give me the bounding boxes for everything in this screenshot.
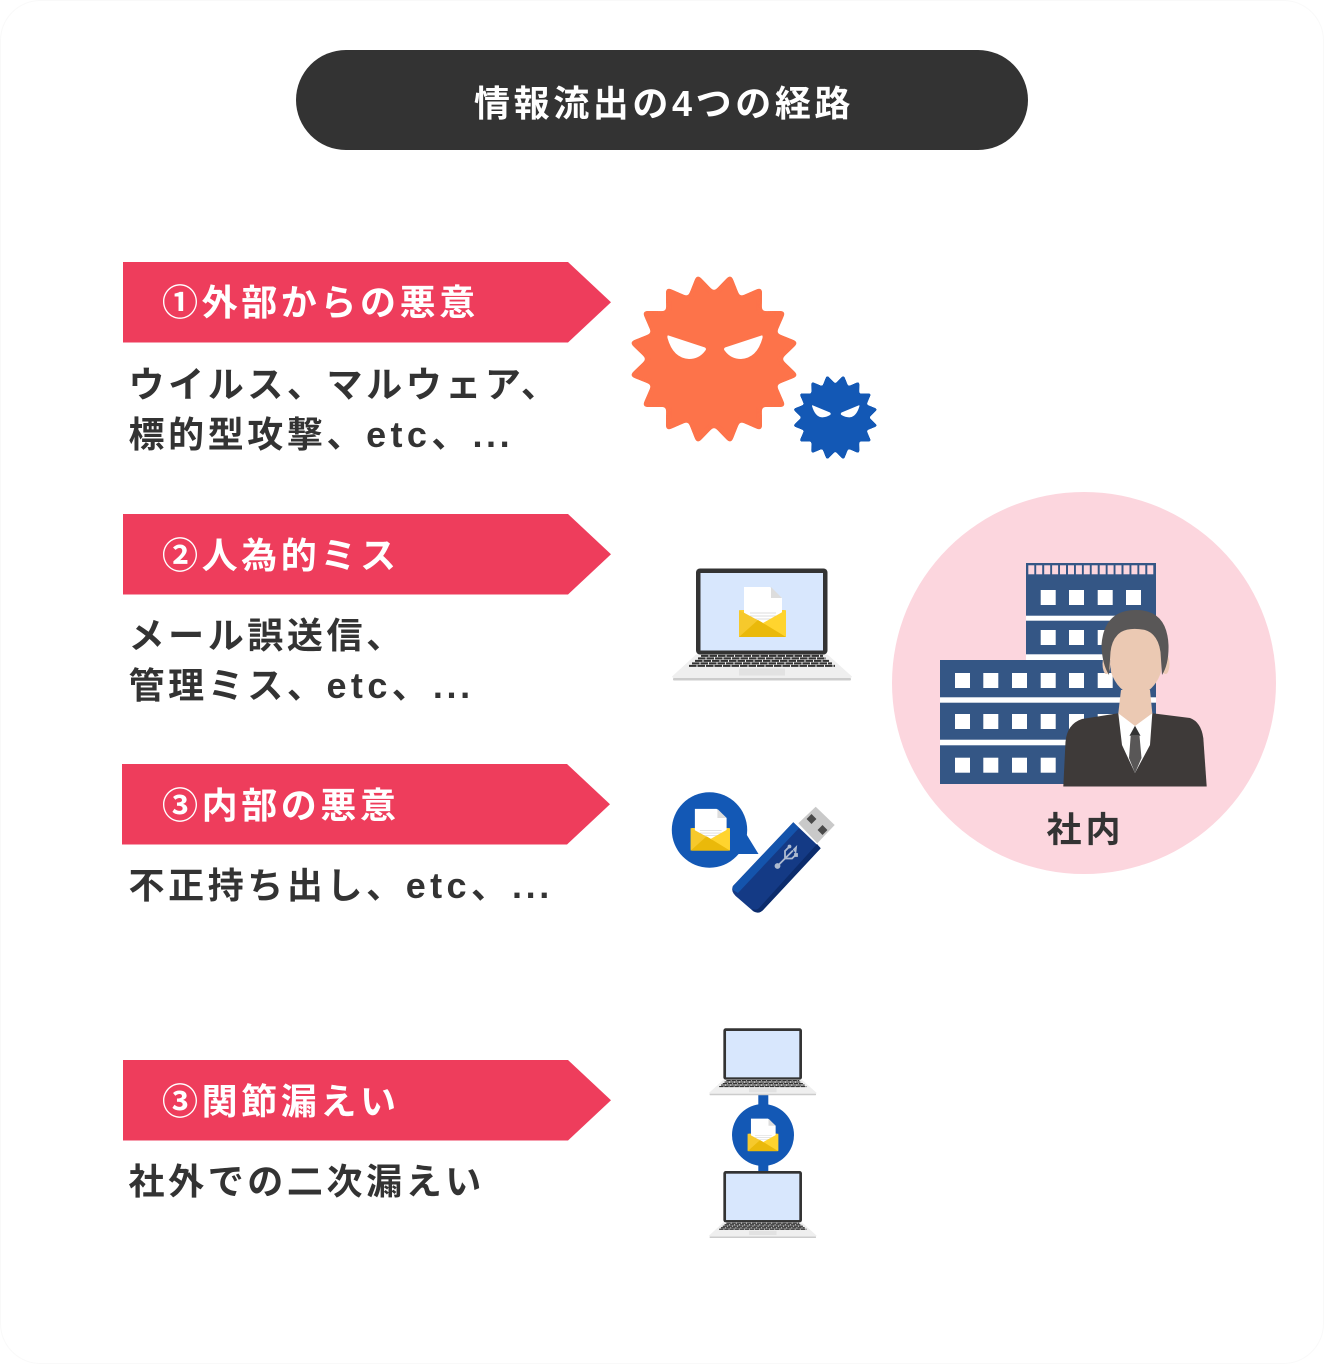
- description 1: 標的型攻撃、etc、...: [128, 414, 513, 455]
- icon: two connected laptops with mail: [709, 1028, 817, 1238]
- ribbon 2: [123, 514, 611, 594]
- panel: company inside circle: [892, 492, 1276, 874]
- ribbon 3: [122, 764, 610, 844]
- icon: USB memory: [732, 807, 835, 913]
- icon: laptop with mail: [672, 568, 852, 680]
- panel: route 2 human error: [123, 514, 611, 706]
- ribbon 4: ③関節漏えい: [162, 1081, 400, 1122]
- ribbon 1: ①外部からの悪意: [162, 282, 479, 323]
- description 2: 管理ミス、etc、...: [128, 665, 474, 706]
- ribbon 3: ③内部の悪意: [162, 785, 400, 826]
- ribbon 2: ②人為的ミス: [162, 535, 400, 576]
- icon: mail speech bubble: [672, 792, 758, 868]
- description 2: [128, 615, 474, 706]
- ribbon 4: [123, 1060, 611, 1140]
- title pill: 情報流出の4つの経路: [474, 83, 854, 124]
- icon: small blue virus: [794, 376, 876, 459]
- icon: large orange virus: [632, 277, 796, 441]
- panel: route 4 joint leak: [123, 1060, 611, 1202]
- description 4: 社外での二次漏えい: [128, 1161, 485, 1202]
- panel: route 1 malicious external: [123, 262, 611, 455]
- pink circle background: [892, 492, 1276, 874]
- description 2: メール誤送信、: [128, 615, 406, 656]
- icon: office buildings: [940, 563, 1156, 784]
- label: inside company: 社内: [1046, 811, 1125, 850]
- panel: route 3 internal malice: [122, 764, 610, 906]
- description 3: 不正持ち出し、etc、...: [128, 865, 553, 906]
- ribbon 1: [123, 262, 611, 342]
- icon: businessman: [1063, 610, 1207, 786]
- description 1: ウイルス、マルウェア、: [128, 364, 561, 405]
- title pill: [296, 50, 1028, 150]
- description 1: [128, 364, 561, 455]
